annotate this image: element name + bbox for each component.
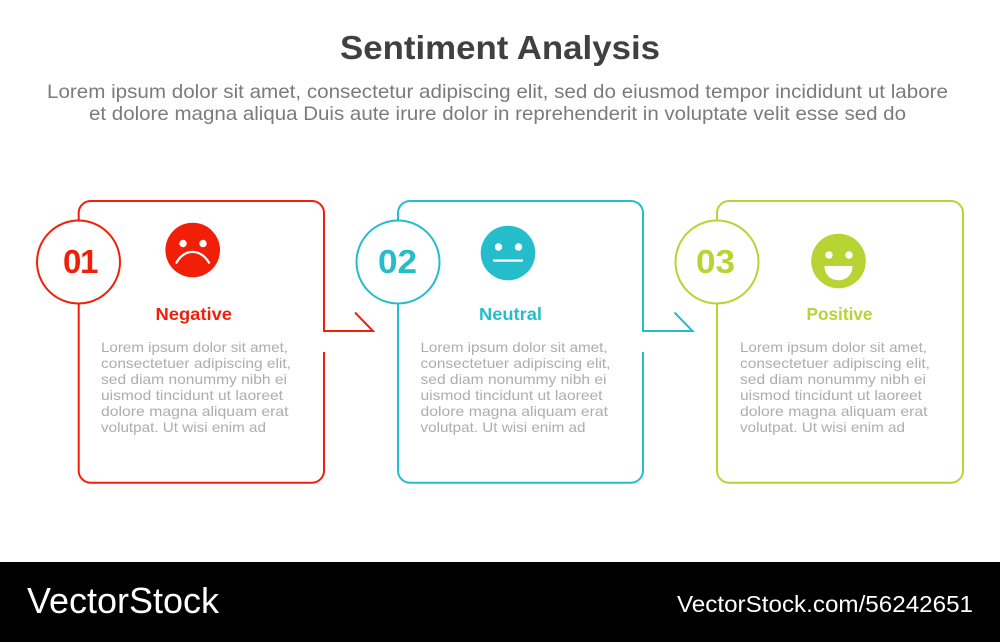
body text: neutral: sed diam nonummy nibh ei [420,371,606,387]
body text: positive: uismod tincidunt ut laoreet [740,387,922,403]
heading: Neutral: Neutral [479,304,542,324]
number badge 03: 03 [696,243,735,280]
footer image id: VectorStock.com/56242651 [677,591,973,617]
body text: negative: sed diam nonummy nibh ei [101,371,287,387]
body text: neutral: volutpat. Ut wisi enim ad [420,419,586,435]
body text: negative: dolore magna aliquam erat [101,403,289,419]
card outline with arrow: negative [79,201,373,483]
panel: positive [676,201,963,483]
body text: positive: dolore magna aliquam erat [740,403,928,419]
number badge 03 [676,220,758,304]
body text: positive [740,339,930,435]
body text: negative: volutpat. Ut wisi enim ad [101,419,266,435]
body text: negative: consectetuer adipiscing elit, [101,355,291,371]
number badge 01 [37,220,120,304]
body text: positive: Lorem ipsum dolor sit amet, [740,339,927,355]
heading: Negative: Negative [156,304,232,324]
icon: neutral face [481,226,535,280]
panel: neutral [356,201,692,483]
body text: positive: sed diam nonummy nibh ei [740,371,926,387]
number badge 02 [356,220,440,304]
body text: positive: volutpat. Ut wisi enim ad [740,419,905,435]
icon: sad face [165,223,220,277]
subtitle text: et dolore magna aliqua Duis aute irure dolor in reprehenderit in voluptate velit esse sed do [89,103,906,125]
title: Sentiment Analysis [340,29,660,66]
body text: positive: consectetuer adipiscing elit, [740,355,930,371]
body text: neutral [420,339,610,435]
footer logo: VectorStock [27,580,220,621]
subtitle text [47,81,948,125]
body text: neutral: Lorem ipsum dolor sit amet, [420,339,608,355]
body text: negative [101,339,291,435]
body text: neutral: consectetuer adipiscing elit, [420,355,610,371]
body text: negative: uismod tincidunt ut laoreet [101,387,283,403]
heading: Positive: Positive [806,304,873,324]
body text: neutral: dolore magna aliquam erat [420,403,608,419]
number badge 01: 01 [63,243,98,280]
icon: happy face [811,234,866,288]
panel: negative [37,201,373,483]
card outline: positive [717,201,963,483]
body text: neutral: uismod tincidunt ut laoreet [420,387,603,403]
subtitle text: Lorem ipsum dolor sit amet, consectetur adipiscing elit, sed do eiusmod tempor incididunt ut labore [47,81,948,103]
footer bar [0,562,1000,642]
number badge 02: 02 [378,243,417,280]
body text: negative: Lorem ipsum dolor sit amet, [101,339,288,355]
card outline with arrow: neutral [398,201,692,483]
